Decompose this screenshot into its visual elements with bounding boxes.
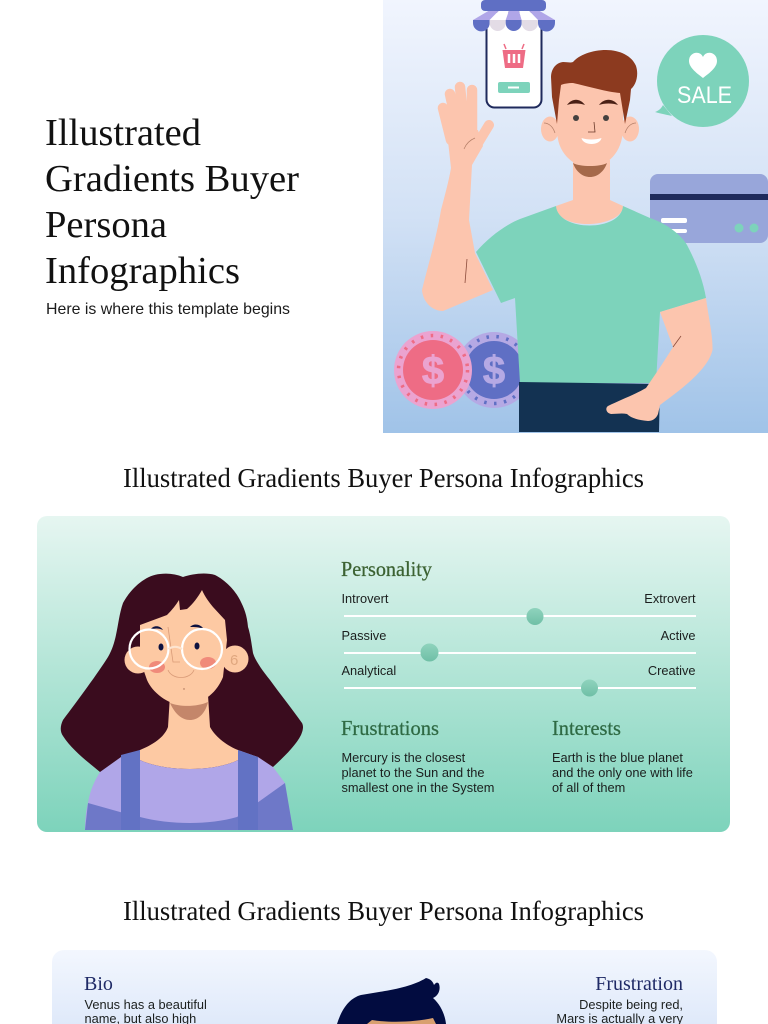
icon: coins bbox=[394, 331, 532, 409]
hero background bbox=[383, 0, 768, 433]
top bbox=[85, 750, 293, 830]
slider: introvert to extrovert bbox=[342, 591, 696, 625]
neck shadow bbox=[170, 702, 208, 720]
interests block: and the only one with life bbox=[552, 765, 693, 780]
section heading 2: Illustrated Gradients Buyer Persona Infographics bbox=[123, 896, 644, 926]
interests block bbox=[552, 716, 693, 795]
section heading 1: Illustrated Gradients Buyer Persona Infographics bbox=[123, 463, 644, 493]
lower arm and hand bbox=[606, 298, 713, 421]
facial features: 6 bbox=[230, 652, 238, 669]
facial features bbox=[149, 625, 238, 690]
face bbox=[140, 590, 227, 705]
t-shirt bbox=[476, 206, 706, 383]
icon: sale bubble: SALE bbox=[677, 82, 732, 109]
panel background bbox=[52, 950, 717, 1024]
hero illustration bbox=[383, 0, 768, 433]
bio block: Venus has a beautiful bbox=[84, 997, 207, 1012]
panel: persona bbox=[37, 516, 730, 832]
personality heading: Personality bbox=[341, 557, 432, 581]
head bbox=[541, 50, 639, 177]
interests block: Earth is the blue planet bbox=[552, 750, 683, 765]
slider: introvert to extrovert: Introvert bbox=[342, 591, 389, 606]
frustrations block: Mercury is the closest bbox=[342, 750, 466, 765]
title: Persona bbox=[45, 204, 167, 246]
subtitle: Here is where this template begins bbox=[46, 301, 290, 318]
bio block bbox=[84, 973, 207, 1024]
frustration block: Frustration bbox=[595, 973, 683, 995]
icon: coins: $ bbox=[483, 349, 505, 393]
icon: sale bubble bbox=[655, 35, 749, 127]
frustration block bbox=[556, 973, 684, 1024]
slider: analytical to creative bbox=[342, 663, 696, 696]
icon: credit card bbox=[650, 174, 768, 243]
frustrations block: planet to the Sun and the bbox=[342, 765, 485, 780]
panel: bio bbox=[52, 950, 717, 1024]
slider: analytical to creative: Analytical bbox=[342, 663, 396, 678]
frustrations block: smallest one in the System bbox=[342, 780, 494, 795]
neck bbox=[556, 160, 623, 224]
frustration block: Despite being red, bbox=[579, 997, 683, 1012]
glasses bbox=[130, 629, 222, 669]
person head top bbox=[337, 978, 446, 1024]
bio block: Bio bbox=[84, 973, 113, 995]
interests block: Interests bbox=[552, 716, 621, 740]
raised arm and hand bbox=[422, 87, 493, 311]
straps bbox=[121, 750, 258, 830]
hair back bbox=[61, 574, 303, 790]
woman portrait bbox=[61, 574, 303, 830]
man figure bbox=[422, 50, 713, 432]
title: Illustrated bbox=[45, 112, 201, 154]
slider: analytical to creative: Creative bbox=[648, 663, 696, 678]
slider: introvert to extrovert: Extrovert bbox=[644, 591, 696, 606]
icon: coins: $ bbox=[422, 349, 444, 393]
slider: passive to active: Passive bbox=[342, 628, 386, 643]
panel background bbox=[37, 516, 730, 832]
ears bbox=[124, 646, 248, 674]
slider: passive to active: Active bbox=[661, 628, 696, 643]
frustrations block bbox=[341, 716, 494, 795]
slider: passive to active bbox=[342, 628, 696, 662]
neck and chest bbox=[140, 695, 238, 769]
icon: mobile shop bbox=[473, 0, 555, 108]
top lower band bbox=[85, 783, 293, 830]
title bbox=[45, 112, 299, 292]
trousers bbox=[519, 382, 660, 432]
interests block: of all of them bbox=[552, 780, 625, 795]
title: Infographics bbox=[45, 250, 240, 292]
title: Gradients Buyer bbox=[45, 158, 299, 200]
frustrations block: Frustrations bbox=[341, 716, 439, 740]
